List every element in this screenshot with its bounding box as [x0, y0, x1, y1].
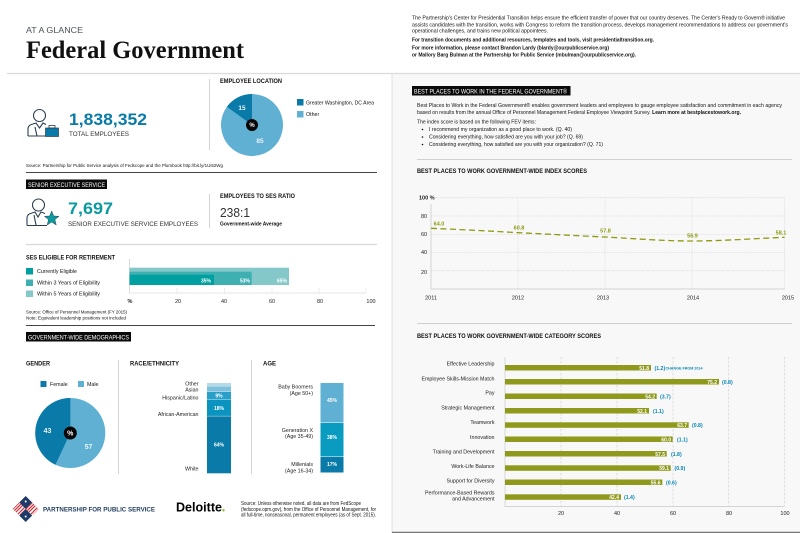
bar chart: category scores: 51.8: [639, 366, 649, 372]
labels: race/ethnicity: Asian: [185, 388, 199, 394]
heading: category scores: BEST PLACES TO WORK GOVERNMENT-WIDE CATEGORY SCORES: [417, 334, 601, 340]
bar chart: retirement eligibility: 35%: [201, 278, 212, 284]
line chart: index scores: 80: [421, 214, 427, 220]
section heading: senior executive service: [26, 180, 107, 189]
labels: age: Millenials: [291, 462, 313, 468]
line chart: index scores: 60: [421, 232, 427, 238]
stacked bar: age: 38%: [327, 435, 338, 441]
legend: employee location: Greater Washington, DC Area: [306, 100, 374, 106]
section heading: government-wide demographics: GOVERNMENT-WIDE DEMOGRAPHICS: [28, 334, 129, 341]
legend: gender: [40, 381, 99, 388]
labels: age: [278, 385, 313, 474]
stacked bar: age: [320, 383, 344, 472]
stacked bar: race/ethnicity: [207, 383, 231, 473]
best places description: The index score is based on the following FEV items:: [417, 120, 536, 126]
panel: employees to SES ratio: EMPLOYEES TO SES RATIO: [220, 194, 295, 200]
stacked bar: age: 45%: [327, 398, 338, 404]
bar chart: category scores: (0.6): [666, 480, 677, 486]
section heading: best places to work: [412, 86, 570, 96]
line chart: index scores: 2014: [687, 296, 699, 302]
pie chart: gender: 57: [85, 444, 92, 451]
labels: age: (Age 16-34): [285, 468, 313, 474]
footer source note: all full-time, nonseasonal, permanent employees (as of Sept. 2015).: [241, 512, 376, 518]
panel: total employees: [28, 110, 147, 138]
bar chart: category scores: [505, 357, 790, 517]
labels: race/ethnicity: White: [185, 467, 199, 473]
labels: race/ethnicity: Other: [185, 382, 199, 388]
retirement source note: Note: Equivalent leadership positions not included: [26, 316, 126, 320]
panel: gender: [26, 362, 105, 468]
bar chart: category scores: (0.8): [692, 423, 703, 429]
retirement source note: [26, 310, 127, 320]
panel: index scores: [417, 169, 794, 302]
pie chart: gender: %: [67, 430, 74, 438]
panel: category scores: [417, 334, 790, 517]
bar chart: retirement eligibility: 65%: [277, 279, 288, 285]
line chart: index scores: 64.0: [434, 222, 444, 228]
best places description: based on results from the annual Office of Personnel Management Federal Employee Viewpoint Survey. Learn more at bestplacestowork.org.: [417, 110, 741, 116]
line chart: index scores: 100 %: [419, 196, 435, 202]
line chart: index scores: 57.8: [600, 229, 611, 235]
bar chart: category scores: (1.8): [671, 452, 682, 458]
legend: gender: Male: [87, 382, 99, 388]
category labels: Support for Diversity: [447, 478, 495, 484]
legend: employee location: Other: [306, 112, 319, 118]
icon: employee with star: [27, 199, 59, 226]
bar chart: retirement eligibility: 53%: [240, 279, 251, 285]
bar chart: category scores: 42.4: [609, 495, 619, 501]
legend: retirement: [26, 268, 100, 298]
bar chart: category scores: 60.0: [661, 437, 671, 443]
bar chart: category scores: 59.1: [659, 466, 669, 472]
bar chart: category scores: 54.2: [645, 394, 655, 400]
category labels: and Advancement: [452, 496, 495, 502]
category labels: Effective Leadership: [447, 361, 495, 367]
section heading: government-wide demographics: [26, 332, 131, 342]
intro text block: The Partnership's Center for Presidential Transition helps ensure the efficient transfer of power that our country deserves. The Center's Ready to Govern® initiative: [412, 14, 785, 22]
logo: deloitte: Deloitte: [176, 500, 222, 514]
stacked bar: race/ethnicity: 18%: [214, 406, 225, 412]
legend: retirement: Within 5 Years of Eligibility: [37, 292, 100, 298]
line chart: index scores: 2015: [782, 296, 794, 302]
pie chart: employee location: 85: [256, 138, 264, 145]
intro text block: For more information, please contact Brandon Lardy (blardy@ourpublicservice.org): [412, 46, 609, 52]
total employees number: 1,838,352: [69, 110, 147, 129]
logo: partnership for public service: [12, 496, 155, 522]
bar chart: category scores: 40: [614, 511, 620, 517]
category labels: Performance-Based Rewards: [425, 490, 495, 496]
line chart: index scores: 60.8: [514, 226, 524, 232]
line chart: index scores: 58.1: [776, 230, 786, 236]
bar chart: category scores: 80: [726, 511, 732, 517]
best places description: [417, 102, 782, 148]
intro text block: operational challenges, and trains new political appointees.: [412, 28, 548, 34]
bar chart: category scores: (1.1): [653, 409, 664, 415]
bar chart: category scores: 75.2: [707, 380, 717, 386]
source note: Source: Partnership for Public Service analysis of Fedscope and the Plumbook http://bit.ly/1Ui52Wg: [26, 163, 223, 168]
category labels: Teamwork: [470, 420, 495, 426]
intro text block: or Mallory Barg Bulman at the Partnership for Public Service (mbulman@ourpublicservice.org).: [412, 52, 636, 58]
line chart: index scores: 56.9: [687, 234, 698, 240]
SES number: 7,697: [68, 199, 113, 218]
panel: SES count: [27, 199, 199, 228]
bar chart: retirement eligibility: 40: [221, 299, 227, 305]
bar chart: category scores: (1.1): [677, 437, 688, 443]
panel: SES eligible for retirement: [26, 256, 376, 320]
bar chart: category scores: 57.5: [655, 452, 665, 458]
labels: age: Generation X: [282, 428, 313, 434]
line chart: index scores: 2011: [425, 296, 437, 302]
labels: race/ethnicity: Hispanic/Latino: [162, 396, 199, 402]
pie chart: gender: [35, 398, 105, 468]
heading: SES eligible: SES ELIGIBLE FOR RETIREMENT: [26, 256, 115, 262]
bar chart: category scores: 63.7: [677, 423, 687, 429]
section heading: best places to work: BEST PLACES TO WORK IN THE FEDERAL GOVERNMENT®: [414, 87, 567, 95]
bar chart: category scores: 60: [670, 511, 676, 517]
icon: employee with briefcase: [28, 110, 58, 136]
intro text block: assists candidates with the transition, works with Congress to reform the transition process, develops management recommendations to address our government's: [412, 22, 788, 28]
bar chart: category scores: 55.6: [651, 480, 661, 486]
legend: employee location: [297, 99, 374, 118]
eyebrow label: AT A GLANCE: [26, 25, 83, 35]
panel: employee location: [220, 79, 374, 156]
category labels: Strategic Management: [441, 406, 495, 412]
pie chart: employee location: %: [249, 123, 255, 129]
category labels: [421, 361, 495, 502]
bar chart: category scores: CHANGE FROM 2014: [666, 366, 703, 370]
bar chart: retirement eligibility: 80: [317, 299, 323, 305]
bar chart: retirement eligibility: 100: [366, 299, 376, 305]
labels: race/ethnicity: African-American: [158, 412, 199, 418]
footer source note: [241, 501, 376, 518]
best places description: Best Places to Work in the Federal Government® enables government leaders and employees to gauge employee satisfaction and commitment in each agency: [417, 102, 782, 109]
stacked bar: race/ethnicity: 64%: [214, 442, 225, 448]
panel: employees to SES ratio: [220, 194, 295, 228]
best places description: I recommend my organization as a good place to work. (Q. 40): [429, 127, 572, 133]
heading: index scores: BEST PLACES TO WORK GOVERNMENT-WIDE INDEX SCORES: [417, 169, 587, 175]
bar chart: category scores: 52.1: [637, 409, 647, 415]
pie chart: employee location: 15: [238, 105, 246, 112]
footer source note: Source: Unless otherwise noted, all data are from FedScope: [241, 501, 361, 507]
category labels: Employee Skills-Mission Match: [421, 376, 495, 382]
category labels: Training and Development: [433, 449, 495, 455]
pie chart: gender: 43: [44, 428, 51, 435]
bar chart: category scores: (0.8): [722, 380, 733, 386]
panel: employees to SES ratio: 238:1: [220, 205, 250, 220]
bar chart: retirement eligibility: %: [128, 299, 133, 305]
line chart: index scores: [419, 196, 794, 302]
line chart: index scores: 2012: [512, 296, 524, 302]
heading: age: AGE: [263, 362, 276, 368]
stacked bar: race/ethnicity: 9%: [215, 394, 223, 400]
labels: age: (Age 35-49): [285, 434, 313, 440]
line chart: index scores: 2013: [597, 296, 609, 302]
labels: age: Baby Boomers: [278, 385, 313, 391]
best places description: Considering everything, how satisfied are you with your organization? (Q. 71): [429, 142, 603, 148]
panel: employees to SES ratio: Government-wide Average: [220, 222, 282, 228]
title: Federal Government: [26, 37, 245, 64]
line chart: index scores: 40: [421, 250, 427, 256]
bar chart: category scores: 100: [780, 511, 790, 517]
pie chart: employee location: [221, 94, 283, 156]
category labels: Innovation: [470, 435, 495, 441]
bar chart: category scores: 20: [558, 511, 564, 517]
category labels: Pay: [485, 391, 495, 397]
bar chart: category scores: (0.9): [674, 466, 685, 472]
bar chart: category scores: (1.2): [654, 366, 665, 372]
line chart: index scores: 20: [421, 270, 427, 276]
footer source note: (fedscope.opm.gov), from the Office of Personnel Management, for: [241, 507, 376, 513]
section heading: senior executive service: SENIOR EXECUTIVE SERVICE: [28, 182, 105, 189]
category labels: Work-Life Balance: [451, 464, 495, 470]
bar chart: retirement eligibility: 60: [269, 299, 275, 305]
total employees label: TOTAL EMPLOYEES: [69, 131, 130, 138]
intro text block: [412, 14, 788, 58]
legend: gender: Female: [50, 382, 68, 388]
heading: race/ethnicity: RACE/ETHNICITY: [130, 362, 179, 368]
intro text block: For transition documents and additional resources, templates and tools, visit presidentialtransition.org.: [412, 38, 654, 44]
SES label: SENIOR EXECUTIVE SERVICE EMPLOYEES: [68, 221, 199, 228]
bar chart: retirement eligibility: [128, 259, 376, 305]
bar chart: category scores: (3.7): [660, 394, 671, 400]
heading: gender: GENDER: [26, 362, 51, 368]
stacked bar: age: 17%: [327, 462, 338, 468]
best places description: Considering everything, how satisfied are you with your job? (Q. 69): [429, 134, 583, 140]
logo: partnership for public service: PARTNERSHIP FOR PUBLIC SERVICE: [43, 506, 155, 514]
heading: employee location: EMPLOYEE LOCATION: [220, 79, 282, 85]
bar chart: retirement eligibility: 20: [175, 299, 181, 305]
bar chart: category scores: (1.4): [624, 495, 635, 501]
retirement source note: Source: Office of Personnel Management (FY 2015): [26, 310, 127, 314]
labels: age: (Age 50+): [290, 391, 313, 397]
labels: race/ethnicity: [158, 382, 199, 473]
panel: age: [263, 362, 344, 474]
right page background: [392, 74, 800, 533]
legend: retirement: Currently Eligible: [37, 269, 77, 275]
panel: race/ethnicity: [130, 362, 231, 473]
legend: retirement: Within 3 Years of Eligibility: [37, 280, 100, 286]
